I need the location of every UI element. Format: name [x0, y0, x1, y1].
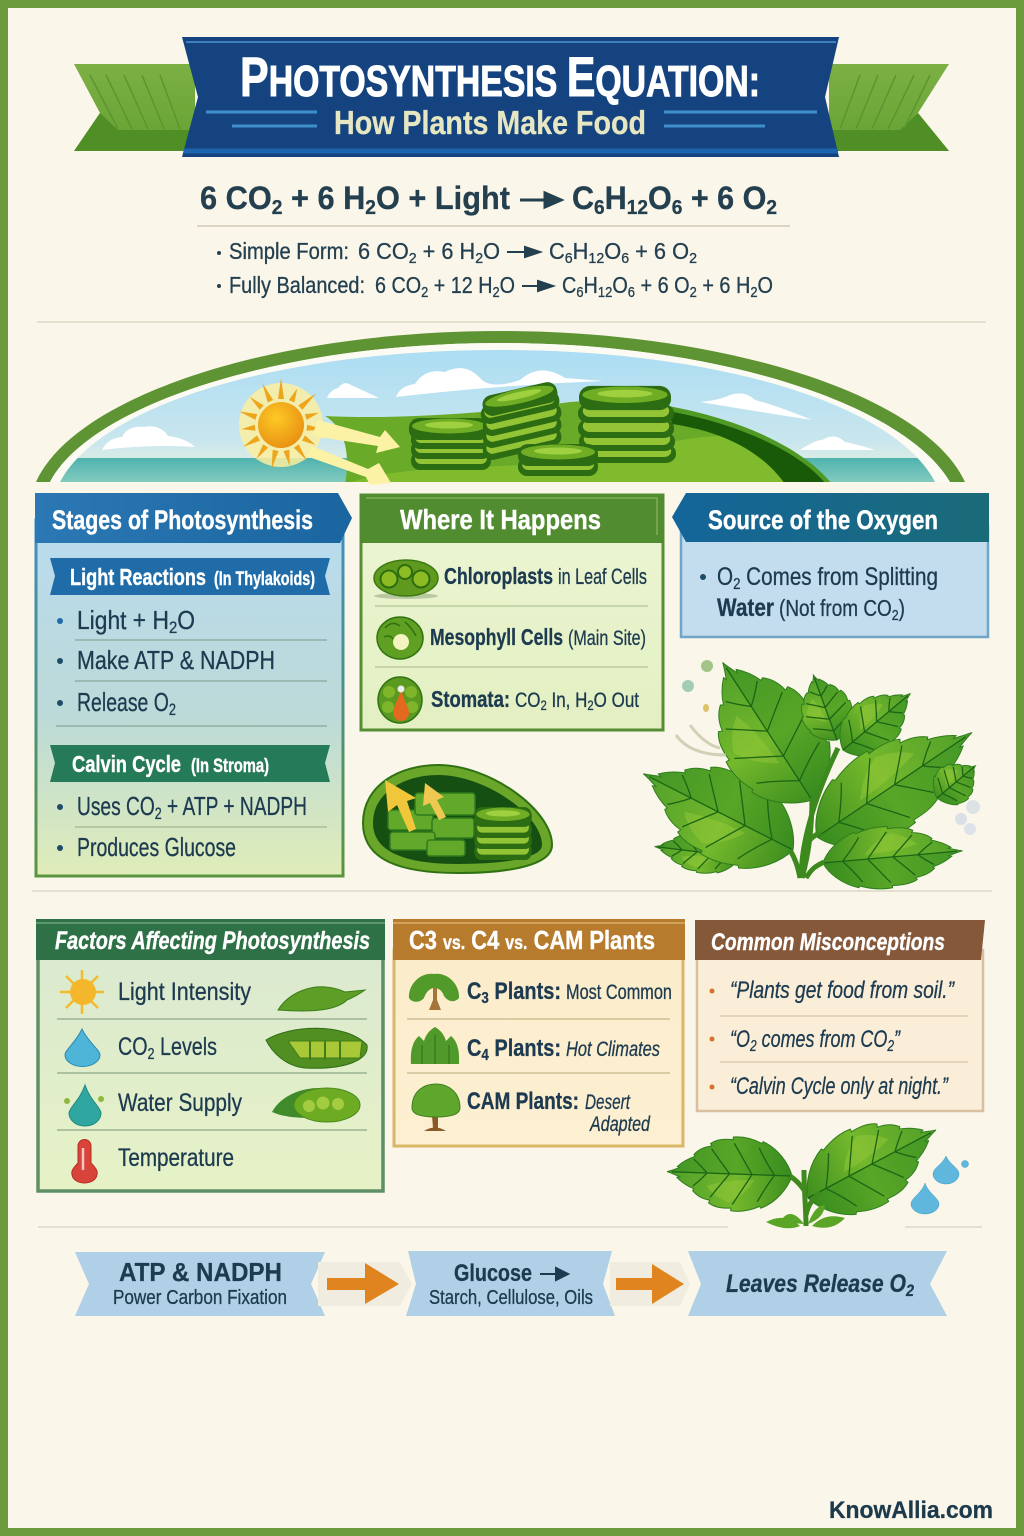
- brand credit: KnowAllia.com: [829, 1497, 993, 1524]
- simple form: 2: [689, 250, 697, 267]
- C3 row: [409, 974, 672, 1010]
- arrow: [610, 1262, 690, 1306]
- C4 row: 4: [481, 1047, 489, 1064]
- factor: temperature: Temperature: [118, 1144, 234, 1172]
- CAM row: Desert: [585, 1091, 631, 1114]
- arrow: [318, 1262, 412, 1306]
- simple form: 6: [621, 250, 629, 267]
- light reactions banner: Light Reactions: [70, 564, 206, 590]
- fully balanced form: 12: [598, 284, 612, 301]
- oxygen text: Water: [717, 594, 774, 622]
- C4 row: Plants:: [489, 1035, 561, 1062]
- misconception 2: ”: [894, 1026, 901, 1053]
- calvin cycle list: 2: [155, 804, 162, 823]
- fully balanced form: Fully Balanced:: [229, 272, 365, 298]
- main equation: O: [648, 180, 672, 216]
- where header: [360, 494, 664, 543]
- flow step: glucose: Starch, Cellulose, Oils: [429, 1287, 593, 1309]
- main equation: 12: [627, 197, 648, 219]
- C3 row: 3: [481, 990, 489, 1007]
- stomata label: [431, 686, 639, 713]
- simple form: + 6 H: [417, 238, 475, 264]
- light reactions list: 2: [169, 700, 176, 719]
- main title: PHOTOSYNTHESIS EQUATION:: [240, 45, 760, 108]
- fully balanced form: 2: [492, 284, 500, 301]
- icon: stoma: [378, 677, 422, 723]
- subtitle: How Plants Make Food: [334, 104, 646, 141]
- main equation: H: [605, 180, 627, 216]
- oxygen text: 2: [892, 607, 899, 624]
- sun: [238, 378, 325, 470]
- illustration: chloroplast cross-section: [363, 765, 552, 873]
- simple form: [217, 238, 697, 267]
- fully balanced form: H: [584, 272, 598, 298]
- mesophyll label: (Main Site): [568, 627, 646, 650]
- misconception 3: “Calvin Cycle only at night.”: [730, 1073, 949, 1100]
- where header: Where It Happens: [400, 504, 601, 535]
- fully balanced form: + 12 H: [428, 272, 492, 298]
- flow step: ATP and NADPH: ATP & NADPH: [119, 1257, 282, 1287]
- factor: temperature: [72, 1140, 234, 1183]
- C4 row: [411, 1027, 660, 1064]
- factors header: Factors Affecting Photosynthesis: [55, 927, 370, 955]
- fully balanced form: O: [758, 272, 773, 298]
- equation forms: [217, 238, 773, 301]
- sunlight arrows: [306, 420, 400, 485]
- fully balanced form: [217, 272, 773, 301]
- clouds: [102, 368, 875, 450]
- simple form: O: [483, 238, 500, 264]
- simple form: 2: [409, 250, 417, 267]
- flow step: ATP and NADPH: Power Carbon Fixation: [113, 1287, 287, 1309]
- fully balanced form: 2: [750, 284, 758, 301]
- main equation: C: [572, 180, 595, 216]
- title banner: [74, 37, 949, 157]
- flow step: leaves release oxygen: 2: [905, 1281, 914, 1300]
- panel: source of the oxygen: [672, 493, 989, 637]
- oxygen text: Comes from Splitting: [740, 563, 938, 591]
- flow step: glucose: Glucose: [454, 1260, 532, 1287]
- panel: C3 vs C4 vs CAM plants: [393, 919, 685, 1146]
- misconceptions header: Common Misconceptions: [711, 929, 945, 956]
- mesophyll label: Mesophyll Cells: [430, 624, 563, 650]
- chloroplasts label: [444, 563, 647, 589]
- arrow: [520, 193, 561, 207]
- calvin cycle list: Uses CO: [77, 791, 182, 821]
- calvin cycle banner: Calvin Cycle: [72, 751, 181, 777]
- C3 row: Most Common: [566, 981, 672, 1004]
- C4 row: Hot Climates: [566, 1038, 660, 1061]
- stomata label: CO: [515, 689, 546, 712]
- sea: [60, 458, 935, 482]
- simple form: 12: [588, 250, 604, 267]
- CAM row: CAM Plants:: [467, 1088, 579, 1115]
- misconceptions header: [695, 920, 985, 960]
- thylakoid stack 1: [409, 418, 491, 470]
- calvin cycle list: [57, 791, 327, 862]
- stages header: Stages of Photosynthesis: [52, 505, 313, 535]
- C3 row: C: [467, 978, 484, 1005]
- fully balanced form: 6 CO: [375, 272, 429, 298]
- factor: water supply: Water Supply: [118, 1089, 242, 1117]
- C4 row: C: [467, 1035, 484, 1062]
- flow step: glucose: [406, 1251, 615, 1316]
- main equation: 6: [594, 197, 605, 219]
- simple form: O: [604, 238, 621, 264]
- light reactions list: [56, 605, 327, 726]
- factor: light intensity: [60, 970, 365, 1014]
- factor: CO2 levels: Levels: [155, 1033, 217, 1061]
- fully balanced form: 2: [690, 284, 697, 301]
- fully balanced form: C: [562, 272, 579, 298]
- simple form: 6: [565, 250, 573, 267]
- factor: light intensity: Light Intensity: [118, 978, 251, 1006]
- stomata label: In, H: [547, 689, 587, 712]
- fully balanced form: O: [612, 272, 628, 298]
- main equation: [200, 180, 777, 219]
- light reactions list: 2: [169, 618, 177, 637]
- main equation: 2: [365, 197, 376, 219]
- left green ribbon tail: [74, 64, 195, 151]
- main equation: 6 CO: [200, 180, 275, 216]
- stages header: [35, 493, 352, 543]
- main equation: 2: [272, 197, 282, 219]
- fully balanced form: 6: [576, 284, 584, 301]
- main equation: + 6 O: [682, 180, 766, 216]
- simple form: 2: [475, 250, 483, 267]
- flow step: leaves release oxygen: [688, 1251, 947, 1316]
- calvin cycle list: Produces Glucose: [77, 832, 236, 862]
- calvin cycle banner: [50, 745, 330, 782]
- fully balanced form: + 6 O: [635, 272, 690, 298]
- bottom flow: [75, 1251, 947, 1316]
- chloroplasts label: in Leaf Cells: [558, 564, 647, 589]
- factor: CO2 levels: 2: [148, 1046, 155, 1063]
- thylakoid stack 3: [578, 386, 676, 463]
- misconception 2: “O: [730, 1026, 757, 1053]
- source header: [672, 493, 989, 542]
- simple form: 6 CO: [358, 238, 412, 264]
- misconception 2: 2: [887, 1038, 894, 1055]
- light reactions list: Make ATP & NADPH: [77, 645, 275, 675]
- illustration: small plant with water drops: [666, 1093, 968, 1234]
- stomata label: 2: [540, 697, 547, 713]
- plants header: C3 vs. C4 vs. CAM Plants: [409, 925, 655, 955]
- stomata label: O Out: [594, 689, 639, 712]
- light reactions list: Release O: [77, 687, 200, 717]
- plants header: [393, 919, 685, 960]
- factors header: [36, 919, 385, 960]
- misconception 2: [710, 1026, 901, 1055]
- simple form: C: [549, 238, 566, 264]
- panel: factors affecting photosynthesis: [36, 919, 385, 1191]
- light reactions banner: (In Thylakoids): [214, 569, 315, 590]
- light reactions list: Light + H: [77, 605, 182, 635]
- right green ribbon tail: [829, 64, 949, 151]
- floating leaf fragment: [924, 750, 989, 814]
- illustration: leafy plant: [623, 634, 996, 894]
- main equation: 2: [766, 197, 777, 219]
- main equation: + 6 H: [282, 180, 365, 216]
- factor: water supply: [64, 1085, 360, 1126]
- oxygen text: ): [899, 595, 905, 621]
- misconception 3: [710, 1073, 949, 1100]
- flow step: leaves release oxygen: Leaves Release O: [726, 1270, 939, 1298]
- simple form: Simple Form:: [229, 238, 349, 264]
- factor: CO2 levels: CO: [118, 1033, 156, 1061]
- calvin cycle list: + ATP + NADPH: [162, 791, 307, 821]
- thylakoid stack 4: [518, 444, 598, 476]
- fully balanced form: O: [500, 272, 515, 298]
- simple form: H: [573, 238, 588, 264]
- stomata label: Stomata:: [431, 686, 510, 712]
- oxygen text: 2: [733, 576, 741, 593]
- chloroplast hill: [325, 402, 720, 482]
- light reactions list: O: [177, 605, 195, 635]
- fully balanced form: 2: [421, 284, 428, 301]
- source header: Source of the Oxygen: [708, 505, 938, 535]
- fully balanced form: + 6 H: [697, 272, 750, 298]
- light reactions banner: [50, 558, 330, 595]
- main equation: 6: [672, 197, 682, 219]
- panel: common misconceptions: [695, 920, 985, 1111]
- factor: CO2 levels: [65, 1028, 367, 1068]
- C3 row: Plants:: [489, 978, 561, 1005]
- misconception 2: comes from CO: [757, 1026, 887, 1053]
- panel: where it happens: [360, 494, 664, 730]
- misconception 1: “Plants get food from soil.”: [730, 977, 955, 1004]
- hero illustration: chloroplast landscape dome: [36, 331, 965, 485]
- oxygen text: O: [717, 563, 736, 591]
- icon: chloroplast: [374, 560, 438, 599]
- flow step: ATP and NADPH: [75, 1252, 325, 1316]
- chloroplasts label: Chloroplasts: [444, 563, 553, 589]
- water drops: [911, 1156, 968, 1214]
- oxygen text: [700, 563, 938, 624]
- calvin cycle banner: (In Stroma): [191, 756, 269, 777]
- main equation: O + Light: [376, 180, 510, 216]
- navy banner: [182, 37, 839, 157]
- misconception 2: 2: [749, 1038, 757, 1055]
- CAM row: [412, 1084, 651, 1136]
- panel: stages of photosynthesis: [35, 493, 352, 876]
- stomata label: 2: [587, 697, 594, 713]
- oxygen text: (Not from CO: [779, 595, 916, 621]
- CAM row: Adapted: [588, 1113, 651, 1136]
- simple form: + 6 O: [629, 238, 689, 264]
- icon: mesophyll cell: [377, 617, 423, 659]
- fully balanced form: 6: [628, 284, 635, 301]
- thylakoid stack 2: [479, 380, 563, 462]
